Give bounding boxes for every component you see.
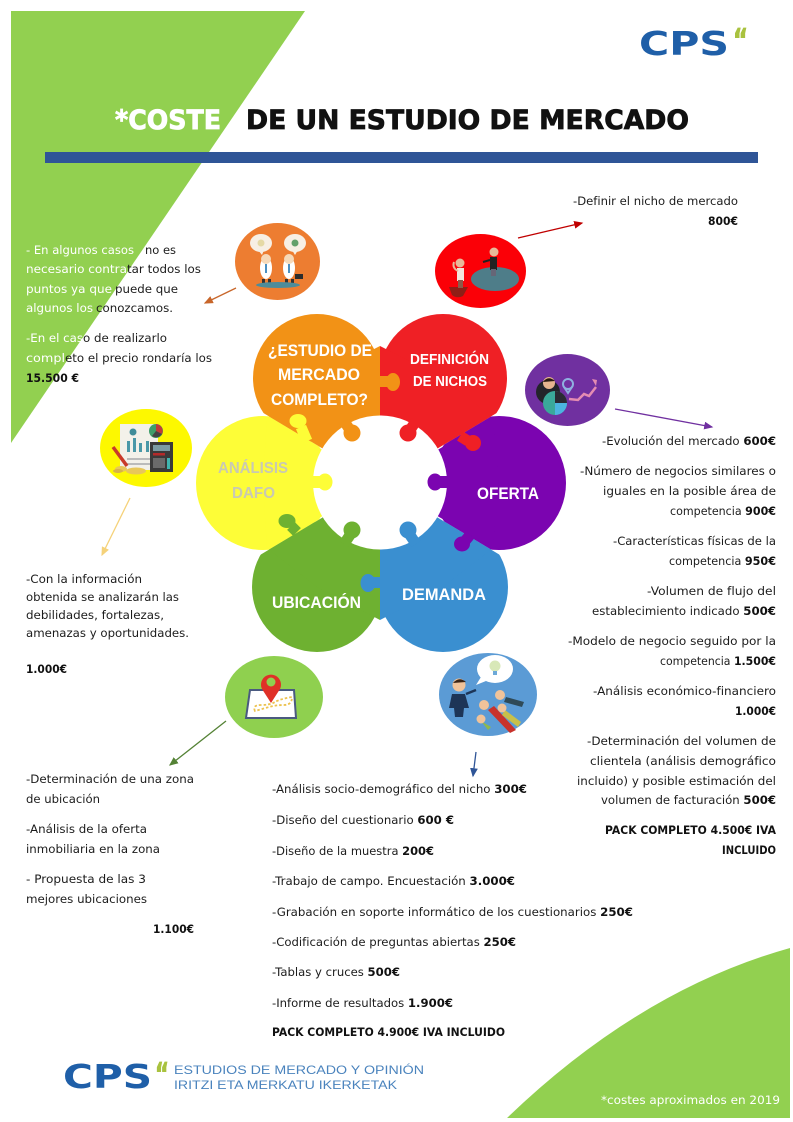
puzzle tab: blue into green — [360, 574, 382, 592]
puzzle tab: blue into hole — [400, 522, 416, 544]
logo: CPS top right: “ — [733, 23, 748, 58]
text: análisis DAFO: 1.000€ — [26, 662, 67, 676]
text: ubicación: de ubicación — [26, 792, 100, 806]
puzzle labels — [218, 342, 539, 612]
puzzle labels: DAFO — [232, 485, 275, 502]
text: oferta: -Análisis económico-financiero — [593, 684, 776, 698]
text: estudio completo: puede que — [115, 282, 178, 296]
puzzle labels: MERCADO — [278, 366, 360, 384]
text: demanda: -Tablas y cruces 500€ — [272, 965, 400, 979]
text: análisis DAFO: debilidades, fortalezas, — [26, 608, 164, 622]
text: análisis DAFO: -Con la información — [26, 572, 142, 586]
arrow: blue to demanda list — [473, 752, 476, 776]
arrow: purple to oferta list — [615, 409, 712, 427]
puzzle labels: DEFINICIÓN — [410, 350, 489, 368]
text: análisis DAFO: amenazas y oportunidades. — [26, 626, 189, 640]
puzzle tab: purple into hole — [428, 474, 448, 490]
text: ubicación: 1.100€ — [153, 922, 194, 936]
text: estudio completo: 15.500 € — [26, 371, 79, 385]
icon: análisis financiero calculator — [100, 409, 192, 487]
text: análisis DAFO: obtenida se analizarán las — [26, 590, 179, 604]
footer logo: CPS — [63, 1057, 152, 1096]
puzzle tab: green into yellow — [278, 514, 297, 532]
puzzle labels: DE NICHOS — [413, 374, 487, 390]
puzzle flower — [196, 314, 566, 652]
text: demanda: -Grabación en soporte informático de los cuestionarios 250€ — [272, 905, 633, 919]
puzzle labels: ANÁLISIS — [218, 458, 288, 477]
icon: map with location pin — [225, 656, 323, 738]
text: oferta: competencia 900€ — [670, 504, 776, 518]
puzzle tab: orange into hole — [344, 421, 360, 442]
text: oferta: 1.000€ — [735, 704, 776, 718]
puzzle labels: COMPLETO? — [271, 391, 368, 409]
text: definir el nicho: 800€ — [708, 214, 738, 228]
logo: CPS top right — [639, 23, 748, 63]
puzzle tab: green into hole — [344, 522, 360, 544]
text: definir el nicho: -Definir el nicho de mercado — [573, 194, 738, 208]
arrow: orange to estudio completo — [205, 288, 236, 303]
text: oferta: iguales en la posible área de — [603, 484, 776, 498]
title: *COSTE — [115, 105, 221, 136]
icon: definición de nichos people and pie — [435, 234, 526, 308]
text: análisis DAFO — [26, 572, 189, 676]
text: demanda: PACK COMPLETO 4.900€ IVA INCLUIDO — [272, 1025, 505, 1039]
text: oferta: -Volumen de flujo del — [647, 584, 776, 598]
puzzle piece: análisis DAFO — [196, 416, 322, 550]
text: estudio completo: - En algunos casos — [26, 243, 134, 257]
puzzle piece: estudio de mercado completo — [253, 314, 380, 448]
puzzle tab: red into purple — [460, 435, 481, 451]
green curved corner bottom-right background — [507, 948, 790, 1118]
text: oferta — [568, 434, 776, 857]
text: estudio completo: puntos ya que — [26, 282, 112, 296]
title: DE UN ESTUDIO DE MERCADO — [246, 105, 689, 136]
text: ubicación: mejores ubicaciones — [26, 892, 147, 906]
text: demanda: -Análisis socio-demográfico del nicho 300€ — [272, 782, 527, 796]
puzzle labels: OFERTA — [477, 485, 539, 503]
text: estudio completo: compl — [26, 351, 65, 365]
text: demanda: -Informe de resultados 1.900€ — [272, 996, 453, 1010]
arrow: green to ubicación list — [170, 721, 226, 765]
text: oferta: -Determinación del volumen de — [587, 734, 776, 748]
text: oferta: -Número de negocios similares o — [580, 464, 776, 478]
text: estudio completo: conozcamos. — [96, 301, 173, 315]
text: estudio completo: -En el cas — [26, 331, 83, 345]
text: oferta: incluido) y posible estimación del — [577, 774, 776, 788]
text: oferta: competencia 950€ — [669, 554, 776, 568]
footnote: *costes aproximados en 2019 — [601, 1093, 780, 1107]
icon: two businessmen with ideas — [235, 223, 320, 300]
text: demanda: -Codificación de preguntas abiertas 250€ — [272, 935, 516, 949]
footer logo: IRITZI ETA MERKATU IKERKETAK — [174, 1080, 397, 1092]
text: oferta: INCLUIDO — [722, 843, 776, 857]
text: oferta: clientela (análisis demográfico — [590, 754, 776, 768]
text: oferta: PACK COMPLETO 4.500€ IVA — [605, 823, 776, 837]
text: oferta: volumen de facturación 500€ — [601, 793, 776, 807]
arrow: yellow to DAFO text — [102, 498, 130, 555]
text: ubicación: -Determinación de una zona — [26, 772, 194, 786]
footer logo — [63, 1057, 424, 1096]
puzzle tab: purple into blue — [454, 535, 470, 552]
puzzle piece: oferta — [438, 416, 566, 550]
text: estudio completo: tar todos los — [127, 262, 201, 276]
text: demanda: -Diseño de la muestra 200€ — [272, 844, 434, 858]
text: estudio completo: o de realizarlo — [83, 331, 167, 345]
text: oferta: competencia 1.500€ — [660, 654, 776, 668]
logo: CPS top right: CPS — [639, 24, 729, 63]
puzzle piece: definición de nichos — [380, 314, 507, 448]
puzzle labels: DEMANDA — [402, 586, 486, 604]
text: estudio completo: necesario contra — [26, 262, 127, 276]
center hole — [313, 416, 447, 550]
text: ubicación: -Análisis de la oferta — [26, 822, 147, 836]
arrow: red to definir nicho — [518, 223, 582, 238]
text: demanda: -Diseño del cuestionario 600 € — [272, 813, 454, 827]
text: demanda: -Trabajo de campo. Encuestación 3.000€ — [272, 874, 515, 888]
text: oferta: establecimiento indicado 500€ — [592, 604, 776, 618]
puzzle tab: red into hole — [400, 421, 416, 442]
puzzle tab: yellow into orange — [290, 414, 307, 441]
title underline bar — [45, 152, 758, 163]
text: demanda — [272, 782, 633, 1039]
puzzle piece: ubicación — [252, 517, 380, 652]
puzzle tab: yellow into hole — [312, 474, 332, 490]
puzzle piece: demanda — [380, 517, 508, 652]
text: oferta: -Modelo de negocio seguido por la — [568, 634, 776, 648]
puzzle labels: UBICACIÓN — [272, 593, 361, 612]
icon: demanda man with lightbulb and hands — [439, 653, 537, 736]
text: definir el nicho — [573, 194, 738, 228]
text: oferta: -Evolución del mercado 600€ — [602, 434, 776, 448]
footer logo: “ — [155, 1057, 169, 1092]
text: ubicación: inmobiliaria en la zona — [26, 842, 160, 856]
icon: evolución del mercado analyst and chart — [525, 354, 610, 426]
puzzle tab: orange into red — [378, 373, 400, 391]
text: oferta: -Características físicas de la — [613, 534, 776, 548]
text: estudio completo: eto el precio rondaría los — [65, 351, 212, 365]
green triangle top-left background — [11, 11, 305, 443]
text: estudio completo: no es — [145, 243, 176, 257]
text: ubicación: - Propuesta de las 3 — [26, 872, 146, 886]
puzzle labels: ¿ESTUDIO DE — [268, 342, 372, 360]
text: ubicación — [26, 772, 194, 936]
text: estudio completo — [26, 243, 212, 385]
text: estudio completo: algunos los — [26, 301, 93, 315]
footer logo: ESTUDIOS DE MERCADO Y OPINIÓN — [174, 1064, 424, 1077]
